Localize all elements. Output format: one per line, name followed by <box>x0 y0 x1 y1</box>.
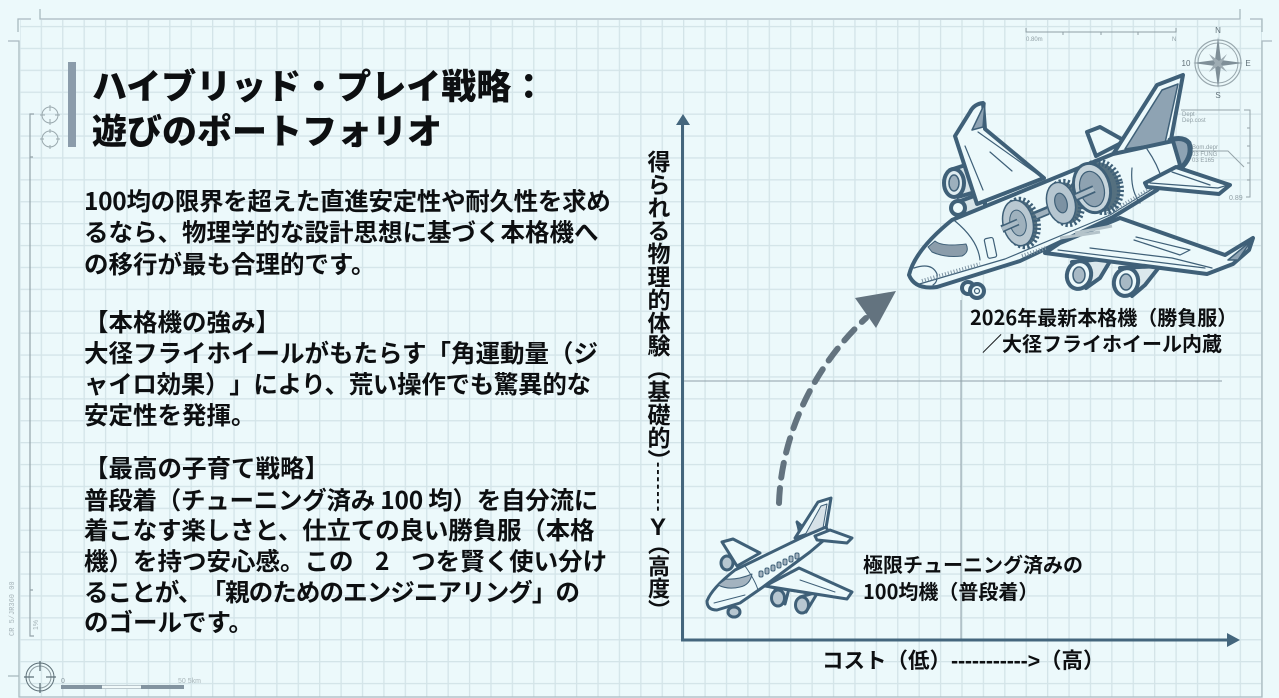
label: large plane <box>970 302 1237 357</box>
body text: 100均の限界を超えた直進安定性や耐久性を求め <box>84 183 610 218</box>
flywheel gears and shaft <box>999 158 1126 249</box>
scale bar: 0 <box>61 678 65 685</box>
body text: 普段着（チューニング済み 100 均）を自分流に <box>84 482 598 517</box>
label: large plane: 2026年最新本格機（勝負服） <box>970 302 1237 331</box>
fuselage <box>909 141 1180 288</box>
door <box>984 237 997 259</box>
y axis label: 得られる物理的体験（基礎的） <box>642 150 676 472</box>
y axis label: ------- <box>650 462 667 513</box>
tail fin <box>795 498 831 538</box>
title <box>92 59 546 155</box>
label: small plane <box>863 549 1083 605</box>
near engines <box>772 585 818 613</box>
body text: ることが、「親のためのエンジニアリング」の <box>84 574 579 609</box>
far wing <box>955 103 1044 204</box>
label: large plane: ／大径フライホイール内蔵 <box>982 328 1222 357</box>
near wing <box>765 568 852 599</box>
label: small plane: 極限チューニング済みの <box>863 549 1083 578</box>
near wing <box>1045 218 1253 274</box>
body text: のゴールです。 <box>84 604 253 639</box>
body text: ャイロ効果）」により、荒い操作でも驚異的な <box>84 366 591 401</box>
body text: 機）を持つ安心感。この 2 つを賢く使い分け <box>84 543 607 578</box>
far wing <box>722 539 760 566</box>
icon: compass rose: S <box>1215 91 1221 100</box>
x axis label: コスト（低）----------->（高） <box>822 644 1104 675</box>
icon: compass rose: 10 <box>1182 59 1191 68</box>
cabin windows <box>759 553 799 577</box>
body text: 安定性を発揮。 <box>84 397 256 432</box>
icon: compass rose: N <box>1215 26 1221 35</box>
icon: compass rose: E <box>1245 59 1251 68</box>
body text: るなら、物理学的な設計思想に基づく本格機へ <box>84 214 598 249</box>
scale bar: 50 5km <box>178 678 201 685</box>
cockpit window <box>718 574 752 588</box>
top ruler: 0.80m <box>1026 37 1043 43</box>
title: ハイブリッド・プレイ戦略： <box>92 59 546 110</box>
body text: 大径フライホイールがもたらす「角運動量（ジ <box>84 335 598 370</box>
nose gear <box>728 607 740 617</box>
left ruler: 1% <box>33 620 40 630</box>
dimension annotations: 0.89 <box>1229 195 1243 202</box>
near stabilizer <box>815 530 852 543</box>
far stabilizer <box>1087 127 1125 156</box>
near stabilizer <box>1145 167 1230 194</box>
body text: 【最高の子育て戦略】 <box>84 450 329 485</box>
y axis label <box>642 150 676 621</box>
dimension annotations: Dep.cost <box>1182 118 1206 124</box>
far engines <box>944 162 985 216</box>
left ruler: CR 5/JR360 00 <box>9 581 17 636</box>
fuselage <box>707 527 830 610</box>
body text <box>84 183 610 639</box>
y axis label: Y <box>650 514 666 541</box>
body text: 着こなす楽しさと、仕立ての良い勝負服（本格 <box>84 512 594 547</box>
dimension annotations: Dept <box>1182 112 1195 118</box>
tail fin <box>1112 75 1183 156</box>
title: 遊びのポートフォリオ <box>92 104 442 155</box>
title accent bar <box>68 62 76 147</box>
near engines <box>1064 258 1160 299</box>
y axis label: （高度） <box>643 533 675 621</box>
landing gear <box>962 282 984 298</box>
dimension annotations: 03 E165 <box>1192 158 1215 164</box>
dimension annotations: Bom.depr <box>1192 145 1218 151</box>
label: small plane: 100均機（普段着） <box>863 576 1038 605</box>
far stabilizer <box>797 522 806 536</box>
body text: の移行が最も合理的です。 <box>84 246 376 281</box>
belly hatching <box>922 186 1155 281</box>
cockpit window <box>928 241 967 256</box>
top ruler: N <box>1172 37 1176 43</box>
body text: 【本格機の強み】 <box>84 304 280 339</box>
far engine <box>721 556 733 570</box>
tail cone <box>1170 139 1190 170</box>
dimension annotations: 03 FUNG <box>1192 152 1218 158</box>
